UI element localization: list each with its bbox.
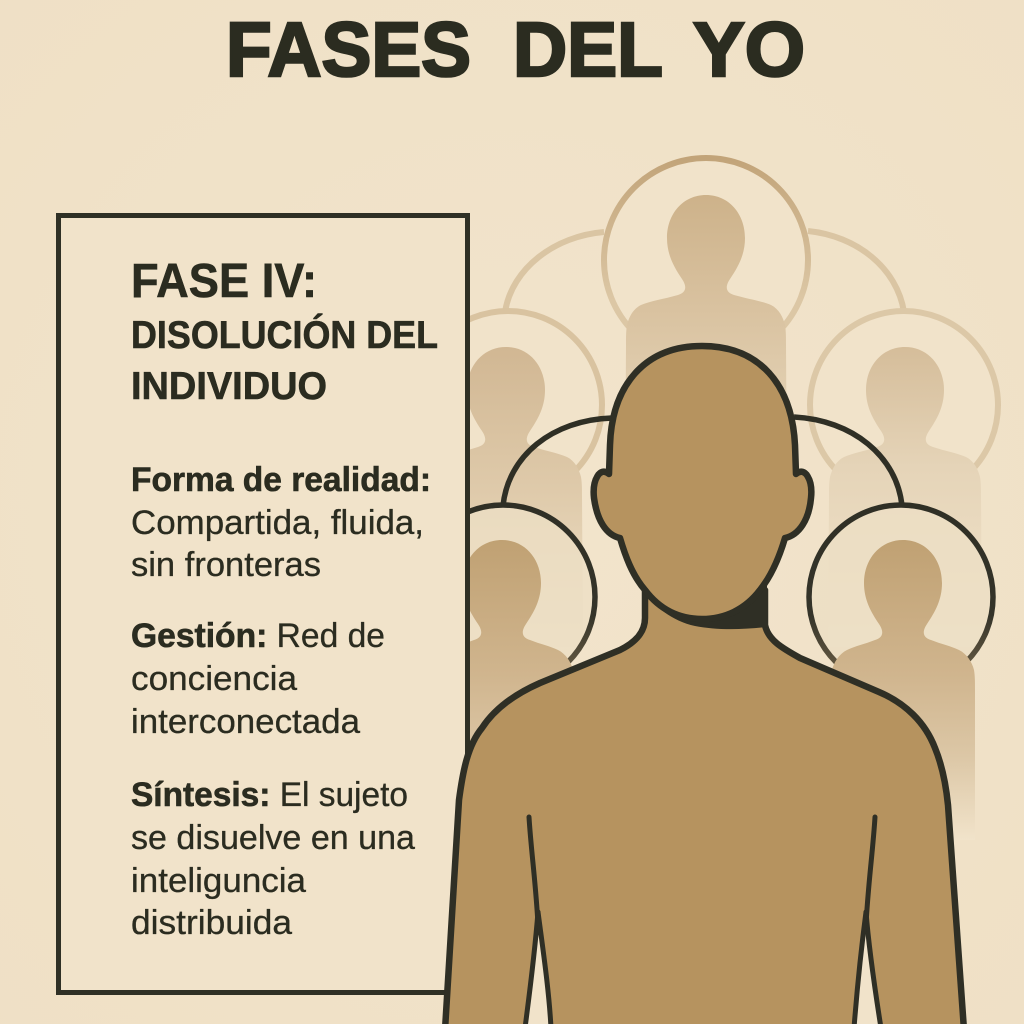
figure: middle left with halo xyxy=(414,311,602,647)
text block: forma de realidad: Compartida, fluida, xyxy=(131,504,424,542)
text block: forma de realidad: sin fronteras xyxy=(131,546,321,584)
figure: front right with halo xyxy=(809,505,993,840)
text block: gestion: Gestión: Red de xyxy=(131,617,385,655)
main figure xyxy=(445,346,964,1024)
text block: gestion: interconectada xyxy=(131,703,360,741)
left arm gap xyxy=(525,925,550,1024)
text block: forma de realidad: Forma de realidad: xyxy=(131,461,431,499)
text block: sintesis: inteliguncia xyxy=(131,862,306,900)
panel heading: FASE IV: xyxy=(131,255,317,308)
neck shadow xyxy=(640,585,767,629)
title: YO xyxy=(693,7,805,93)
figure: top with halo xyxy=(604,158,808,495)
text block: gestion: conciencia xyxy=(131,660,297,698)
panel heading: INDIVIDUO xyxy=(131,365,327,408)
panel frame xyxy=(58,216,468,992)
title xyxy=(226,7,805,93)
text block: sintesis: se disuelve en una xyxy=(131,819,415,857)
arc: back left connection xyxy=(505,232,604,312)
figure: front left with halo xyxy=(411,505,595,840)
panel: Fase IV xyxy=(58,216,468,992)
text block: sintesis xyxy=(131,776,415,942)
panel heading xyxy=(131,255,438,408)
right arm gap xyxy=(855,925,881,1024)
head with ears xyxy=(594,346,811,619)
text block: gestion xyxy=(131,617,385,741)
text block: forma de realidad xyxy=(131,461,431,584)
right arm line xyxy=(854,817,881,1024)
network of background figures xyxy=(411,158,998,840)
body xyxy=(445,590,964,1024)
title: DEL xyxy=(513,7,663,93)
arc: back right connection xyxy=(808,231,904,312)
left arm line xyxy=(525,817,551,1024)
panel heading: DISOLUCIÓN DEL xyxy=(131,313,438,357)
figure: middle right with halo xyxy=(810,311,998,647)
text block: sintesis: distribuida xyxy=(131,904,292,942)
text block: sintesis: Síntesis: El sujeto xyxy=(131,776,408,814)
arc: front right connection xyxy=(794,417,902,506)
title: FASES xyxy=(226,7,471,93)
arc: front left connection xyxy=(503,418,612,506)
